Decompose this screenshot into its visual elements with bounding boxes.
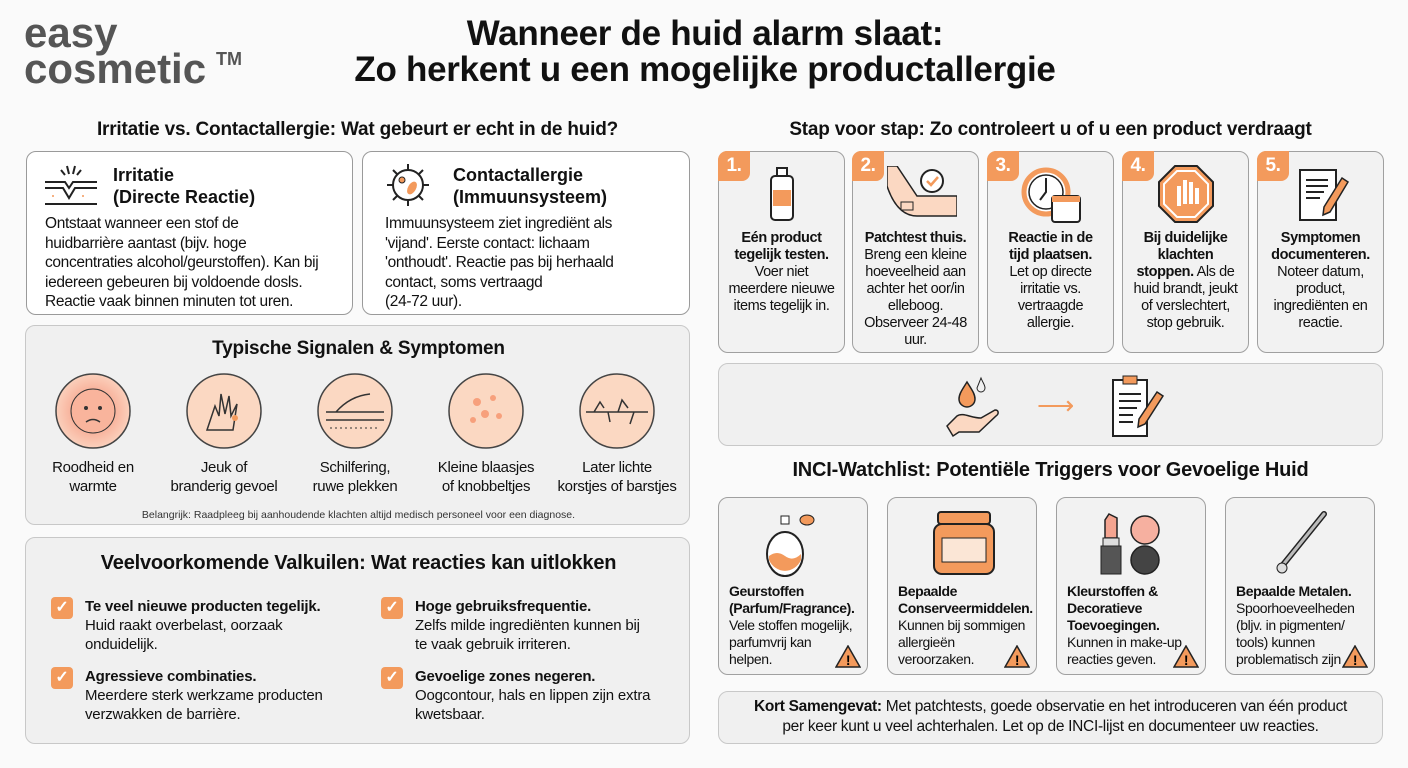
inci: conserveermiddelen: allergieën xyxy=(898,634,955,650)
pitfall 4: Gevoelige zones negeren. xyxy=(415,668,595,685)
pitfall 4: Oogcontour, hals en lippen zijn extra xyxy=(415,687,650,704)
inci: geurstoffen xyxy=(718,497,868,675)
symptom: blaasjes: of knobbeltjes xyxy=(442,478,530,495)
step 1 xyxy=(718,151,845,353)
symptom: jeuk xyxy=(171,373,277,495)
icon: warning xyxy=(835,645,861,668)
pitfall 1: onduidelijk. xyxy=(85,636,158,653)
step 2: hoeveelheid aan xyxy=(865,264,966,280)
step 1: items tegelijk in. xyxy=(734,298,829,314)
step 4: 4. xyxy=(1130,155,1146,176)
pitfall 3: Meerdere sterk werkzame producten xyxy=(85,687,323,704)
panel: contactallergie: (Immuunsysteem) xyxy=(453,187,607,207)
step 3: Reactie in de xyxy=(1008,230,1093,246)
pitfall 3 xyxy=(51,667,323,723)
pitfall 4 xyxy=(381,667,650,723)
symptom: blaasjes xyxy=(438,373,534,495)
symptom: korstjes xyxy=(557,373,677,495)
symptom: jeuk: Jeuk of xyxy=(201,459,247,476)
icon: cracked skin xyxy=(45,166,97,205)
inci: conserveermiddelen: Kunnen bij sommigen xyxy=(898,617,1025,633)
pitfall 2 xyxy=(381,597,640,653)
panel: irritatie: Irritatie xyxy=(113,165,174,185)
heading: irritatie vs contactallergie: Irritatie vs. Contactallergie: Wat gebeurt er echt in de huid? xyxy=(97,119,618,140)
step 1: 1. xyxy=(726,155,742,176)
symptom: korstjes: korstjes of barstjes xyxy=(557,478,677,495)
title: Wanneer de huid alarm slaat: xyxy=(467,14,943,53)
step 3 xyxy=(987,151,1114,353)
step 2: Breng een kleine xyxy=(864,247,967,263)
inci: conserveermiddelen: Conserveermiddelen. xyxy=(898,600,1033,616)
panel: irritatie: huidbarrière aantast (bijv. hoge xyxy=(45,234,246,252)
pitfall 1: Te veel nieuwe producten tegelijk. xyxy=(85,598,320,615)
panel: irritatie: iedereen gebeuren bij voldoende dosls. xyxy=(45,274,302,290)
inci: metalen: problematisch zijn xyxy=(1236,651,1341,667)
step 4 xyxy=(1122,151,1249,353)
step 4: stop gebruik. xyxy=(1147,315,1224,331)
icon: warning xyxy=(1342,645,1368,668)
icon: clipboard xyxy=(1112,376,1164,437)
panel: contactallergie: contact, soms vertraagd xyxy=(385,274,542,290)
step 2 xyxy=(852,151,979,353)
panel: valkuilen: ✓ xyxy=(385,599,399,616)
panel: contactallergie xyxy=(362,151,690,315)
symptom: roodheid: Roodheid en xyxy=(52,459,134,476)
panel: irritatie: Ontstaat wanneer een stof de xyxy=(45,215,239,232)
inci: geurstoffen: parfumvrij kan xyxy=(729,634,811,650)
step 1: Eén product xyxy=(741,230,822,246)
step 3: tijd plaatsen. xyxy=(1009,247,1092,263)
inci: metalen: Spoorhoeveelheden xyxy=(1236,600,1355,616)
step 5: Symptomen xyxy=(1281,230,1360,246)
symptom: blaasjes: Kleine blaasjes xyxy=(438,459,534,476)
symptom: schilfering: ruwe plekken xyxy=(313,478,397,495)
panel: valkuilen: ✓ xyxy=(55,669,69,686)
panel: contactallergie: Contactallergie xyxy=(453,165,583,185)
inci: conserveermiddelen: veroorzaken. xyxy=(898,651,974,667)
inci: kleurstoffen: Decoratieve xyxy=(1067,600,1142,616)
step 5: product, xyxy=(1296,281,1345,297)
inci: geurstoffen: Vele stoffen mogelijk, xyxy=(729,617,852,633)
symptom: korstjes: Later lichte xyxy=(582,459,652,476)
step 3: irritatie vs. xyxy=(1020,281,1081,297)
symptom: roodheid: warmte xyxy=(69,478,117,495)
logo: TM xyxy=(216,49,242,69)
step 2: 2. xyxy=(860,155,876,176)
step 5: documenteren. xyxy=(1271,247,1370,263)
symptom: schilfering: Schilfering, xyxy=(320,459,390,476)
inci: geurstoffen: helpen. xyxy=(729,651,772,667)
panel: contactallergie: 'onthoudt'. Reactie pas bij herhaald xyxy=(385,254,614,271)
logo xyxy=(24,9,242,92)
step 3: 3. xyxy=(995,155,1011,176)
pitfall 2: Zelfs milde ingrediënten kunnen bij xyxy=(415,617,640,634)
step 5: Noteer datum, xyxy=(1277,264,1364,280)
inci: kleurstoffen: reacties geven. xyxy=(1067,651,1156,667)
step 2: achter het oor/in xyxy=(866,281,964,297)
symptom: jeuk: branderig gevoel xyxy=(171,478,277,495)
heading: INCI: INCI-Watchlist: Potentiële Triggers voor Gevoelige Huid xyxy=(792,459,1309,481)
step 3: Let op directe xyxy=(1009,264,1092,280)
step 2: uur. xyxy=(904,332,927,348)
symptom: roodheid xyxy=(52,373,134,495)
heading: valkuilen: Veelvoorkomende Valkuilen: Wat reacties kan uitlokken xyxy=(101,552,616,574)
icon: cell xyxy=(387,164,429,206)
step 1: tegelijk testen. xyxy=(734,247,829,263)
logo: easy xyxy=(24,9,117,56)
inci: kleurstoffen xyxy=(1056,497,1206,675)
title xyxy=(354,14,1056,89)
step 2: Patchtest thuis. xyxy=(865,230,966,246)
panel: irritatie xyxy=(26,151,353,315)
step 2: Observeer 24-48 xyxy=(864,315,967,331)
step 3: vertraagde xyxy=(1018,298,1083,314)
icon: hand with drop xyxy=(946,376,999,437)
heading: stappen: Stap voor stap: Zo controleert u of u een product verdraagt xyxy=(789,119,1312,140)
icon: warning: ! xyxy=(846,652,850,668)
inci: metalen: Bepaalde Metalen. xyxy=(1236,583,1351,599)
step 1: Voer niet xyxy=(755,264,808,280)
pitfall 3: verzwakken de barrière. xyxy=(85,706,240,723)
inci: kleurstoffen: Kleurstoffen & xyxy=(1067,583,1158,599)
inci: kleurstoffen: Toevoegingen. xyxy=(1067,617,1160,633)
pitfall 3: Agressieve combinaties. xyxy=(85,668,256,685)
pitfall 2: Hoge gebruiksfrequentie. xyxy=(415,598,591,615)
inci: geurstoffen: Geurstoffen xyxy=(729,583,804,599)
summary: per keer kunt u veel achterhalen. Let op de INCI-lijst en documenteer uw reacties. xyxy=(782,718,1319,735)
step 5 xyxy=(1257,151,1384,353)
panel: irritatie: concentraties alcohol/geurstoffen). Kan bij xyxy=(45,254,318,271)
pitfall 2: te vaak gebruik irriteren. xyxy=(415,636,571,653)
summary xyxy=(718,691,1383,744)
step 4: klachten xyxy=(1158,247,1213,263)
inci: geurstoffen: (Parfum/Fragrance). xyxy=(729,600,854,616)
inci: conserveermiddelen: Bepaalde xyxy=(898,583,957,599)
panel: irritatie: Reactie vaak binnen minuten tot uren. xyxy=(45,293,293,310)
logo: cosmetic xyxy=(24,45,206,92)
symptom: schilfering xyxy=(313,373,397,495)
step 5: reactie. xyxy=(1298,315,1343,331)
icon: warning: ! xyxy=(1353,652,1357,668)
panel: irritatie: (Directe Reactie) xyxy=(113,187,255,207)
step 4: huid brandt, jeukt xyxy=(1133,281,1238,297)
inci: conserveermiddelen xyxy=(887,497,1037,675)
panel: valkuilen xyxy=(25,537,690,744)
step 4: of verslechtert, xyxy=(1141,298,1230,314)
inci: metalen: tools) kunnen xyxy=(1236,634,1315,650)
heading: symptomen: Typische Signalen & Symptomen xyxy=(212,338,505,359)
panel: symptomen xyxy=(25,325,690,525)
pitfall 1 xyxy=(51,597,320,653)
panel: contactallergie: (24-72 uur). xyxy=(385,293,462,310)
panel: valkuilen: ✓ xyxy=(385,669,399,686)
icon: warning xyxy=(1173,645,1199,668)
pitfall 4: kwetsbaar. xyxy=(415,706,485,723)
step 4: Bij duidelijke xyxy=(1144,230,1227,246)
icon: warning xyxy=(1004,645,1030,668)
icon: warning: ! xyxy=(1015,652,1019,668)
step 5: ingrediënten en xyxy=(1274,298,1367,314)
summary: Kort Samengevat: Met patchtests, goede observatie en het introduceren van één product xyxy=(754,698,1347,715)
inci: metalen xyxy=(1225,497,1375,675)
inci: kleurstoffen: Kunnen in make-up xyxy=(1067,634,1182,650)
arrow: ⟶ xyxy=(1037,390,1074,420)
step 5: 5. xyxy=(1265,155,1281,176)
title: Zo herkent u een mogelijke productallergie xyxy=(354,50,1056,89)
panel: contactallergie: 'vijand'. Eerste contact: lichaam xyxy=(385,234,590,252)
panel: contactallergie: Immuunsysteem ziet ingrediënt als xyxy=(385,215,612,232)
pitfall 1: Huid raakt overbelast, oorzaak xyxy=(85,617,282,634)
icon: warning: ! xyxy=(1184,652,1188,668)
note: Belangrijk: Raadpleeg bij aanhoudende klachten altijd medisch personeel voor een diagnose. xyxy=(142,509,575,521)
step 1: meerdere nieuwe xyxy=(728,281,835,297)
inci: metalen: (bljv. in pigmenten/ xyxy=(1236,617,1344,633)
panel: valkuilen: ✓ xyxy=(55,599,69,616)
step 4: stoppen. Als de xyxy=(1137,264,1234,280)
panel: flow icons xyxy=(718,363,1383,446)
step 3: allergie. xyxy=(1027,315,1074,331)
step 2: elleboog. xyxy=(888,298,943,314)
